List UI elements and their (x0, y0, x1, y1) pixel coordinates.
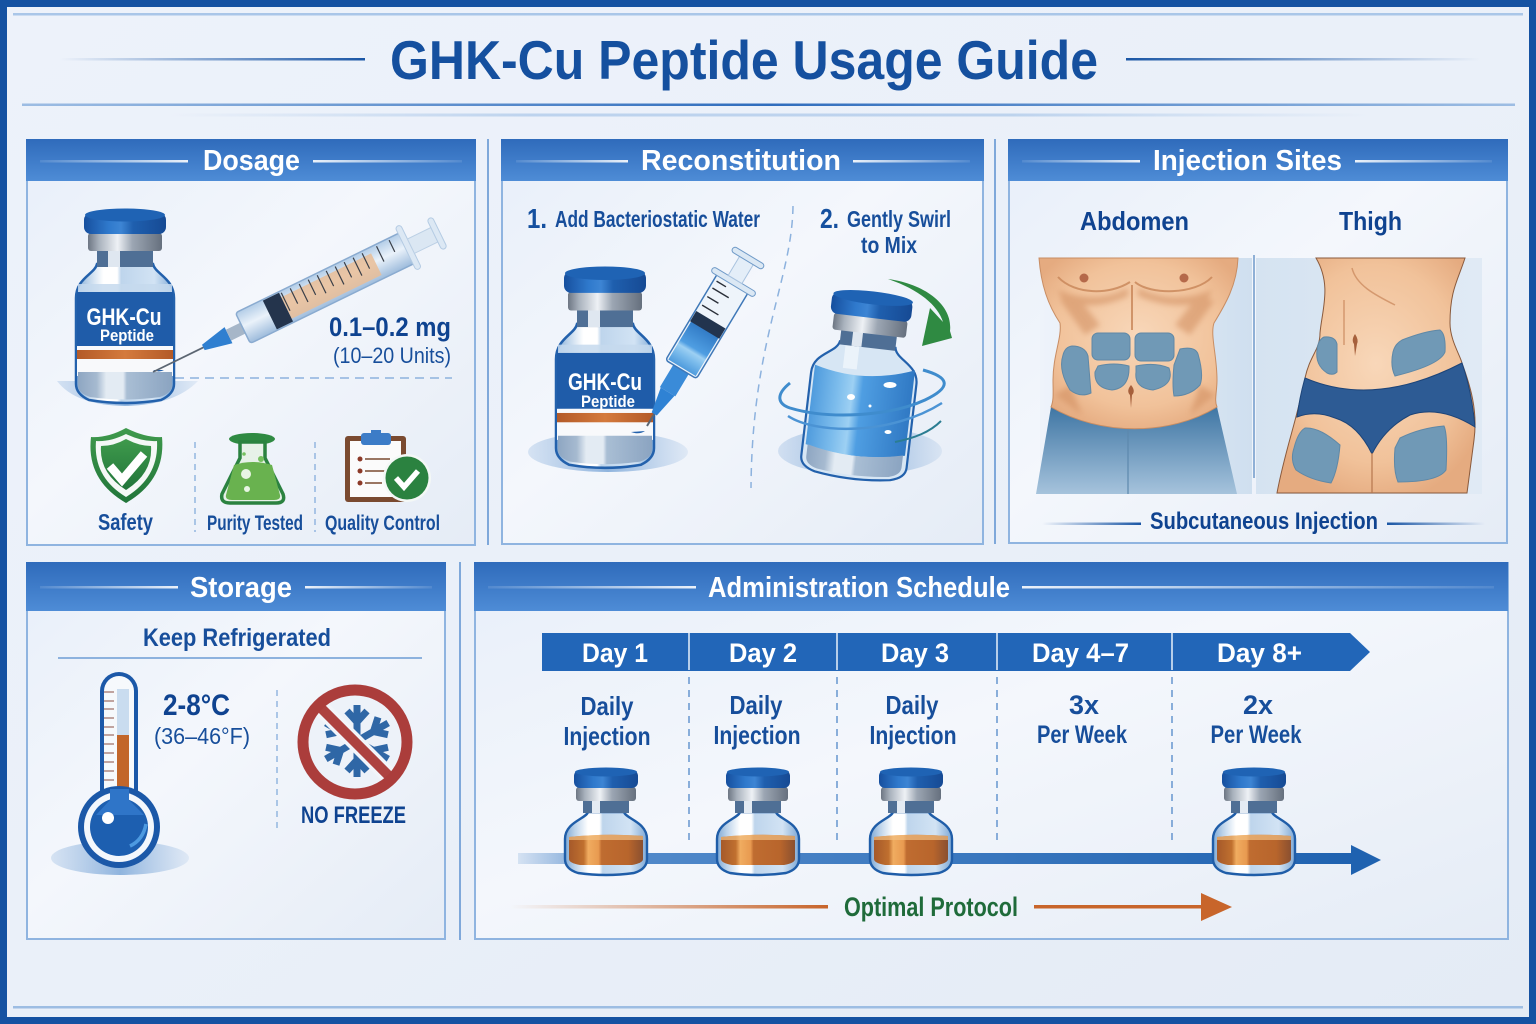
divider dashed (194, 442, 196, 532)
vial: day 3 (870, 768, 952, 875)
icon: no freeze (297, 684, 413, 800)
day 3 dosing text: Injection (870, 720, 956, 750)
step 1 text: 1. (527, 203, 547, 234)
illustration: thigh (1256, 258, 1482, 494)
icon: green rotation arrow (888, 279, 952, 346)
section divider (459, 562, 461, 940)
icon: thermometer (51, 672, 189, 875)
day bar: Day 1 (582, 638, 648, 668)
safety label: Safety (98, 509, 153, 535)
day bar: Day 4–7 (1032, 638, 1129, 668)
day 2 dosing text: Daily (730, 690, 783, 720)
divider dashed (276, 690, 278, 832)
dose amount (329, 312, 451, 368)
injection header (1008, 139, 1508, 181)
panel: dosage (26, 139, 476, 545)
abdomen label: Abdomen (1080, 206, 1189, 236)
icon: swirled vial (778, 285, 944, 485)
panel: administration schedule (474, 562, 1508, 939)
vial: day 8+ (1213, 768, 1295, 875)
icon: syringe step 2 (626, 243, 771, 439)
vial: day 2 (717, 768, 799, 875)
section divider (994, 139, 996, 544)
illustration: abdomen (1036, 258, 1252, 494)
icon: GHK-Cu vial (57, 208, 198, 406)
day bar: Day 2 (729, 638, 797, 668)
title (22, 29, 1515, 116)
section divider (487, 139, 489, 545)
reconstitution header: Reconstitution (641, 145, 841, 177)
keep refrigerated heading: Keep Refrigerated (143, 624, 331, 652)
site divider (1253, 255, 1255, 478)
optimal protocol arrow (510, 892, 1232, 922)
icon: syringe (142, 211, 450, 394)
icon: quality clipboard (345, 430, 431, 502)
divider dashed (314, 442, 316, 532)
day bar: Day 3 (881, 638, 949, 668)
step divider dashed (751, 206, 793, 488)
step 1 text: Add Bacteriostatic Water (555, 206, 760, 232)
vial: day 1 (565, 768, 647, 875)
dose amount: (10–20 Units) (333, 343, 451, 368)
icon: GHK-Cu vial: Peptide (100, 326, 154, 345)
dosage dashed baseline (175, 377, 452, 379)
optimal protocol arrow: Optimal Protocol (844, 892, 1018, 922)
subcutaneous caption: Subcutaneous Injection (1150, 508, 1378, 535)
day 8+ dosing text: Per Week (1210, 721, 1302, 749)
timeline arrow (518, 845, 1381, 875)
day 8+ dosing text: 2x (1243, 690, 1273, 720)
step 2 text: to Mix (861, 232, 917, 258)
step 2 text: Gently Swirl (847, 206, 951, 232)
day 2 dosing text: Injection (714, 720, 800, 750)
thigh label: Thigh (1339, 206, 1402, 236)
day 1 dosing text: Injection (564, 721, 650, 751)
day bar: Day 8+ (1217, 638, 1302, 668)
icon: vial step 1 (528, 267, 688, 472)
day 1 dosing text (564, 691, 650, 751)
no freeze label: NO FREEZE (301, 802, 406, 829)
icon: vial step 1: GHK-Cu (568, 369, 642, 396)
step 2 text: 2. (820, 203, 839, 234)
storage header (26, 562, 446, 611)
temperature range (154, 689, 250, 749)
dose amount: 0.1–0.2 mg (329, 312, 451, 342)
schedule header (474, 562, 1508, 611)
dosage header (26, 139, 476, 181)
panel: reconstitution (501, 139, 984, 544)
icon: GHK-Cu vial: GHK-Cu (86, 304, 162, 331)
day 1 dosing text: Daily (580, 691, 634, 721)
day 8+ dosing text (1210, 690, 1302, 749)
step 1 text (527, 203, 760, 234)
day 4-7 dosing text (1037, 690, 1127, 749)
schedule header: Administration Schedule (708, 572, 1010, 604)
day 2 dosing text (714, 690, 800, 750)
day 3 dosing text: Daily (886, 690, 939, 720)
day bar (542, 633, 1370, 671)
step 2 text (820, 203, 951, 258)
day 4-7 dosing text: Per Week (1037, 721, 1127, 749)
panel: injection sites (1008, 139, 1508, 543)
temperature range: (36–46°F) (154, 723, 250, 749)
icon: vial step 1: Peptide (581, 392, 635, 411)
reconstitution header (501, 139, 984, 181)
schedule dividers (689, 677, 1172, 845)
purity label: Purity Tested (207, 512, 303, 535)
panel: storage (26, 562, 446, 939)
day 3 dosing text (870, 690, 956, 750)
quality label: Quality Control (325, 512, 440, 535)
icon: purity flask (222, 433, 284, 503)
title: GHK-Cu Peptide Usage Guide (390, 29, 1098, 91)
injection header: Injection Sites (1153, 145, 1342, 177)
dosage header: Dosage (203, 145, 300, 177)
icon: safety shield (90, 428, 162, 503)
storage header: Storage (190, 572, 292, 604)
temperature range: 2-8°C (163, 689, 230, 722)
day 4-7 dosing text: 3x (1069, 690, 1099, 720)
